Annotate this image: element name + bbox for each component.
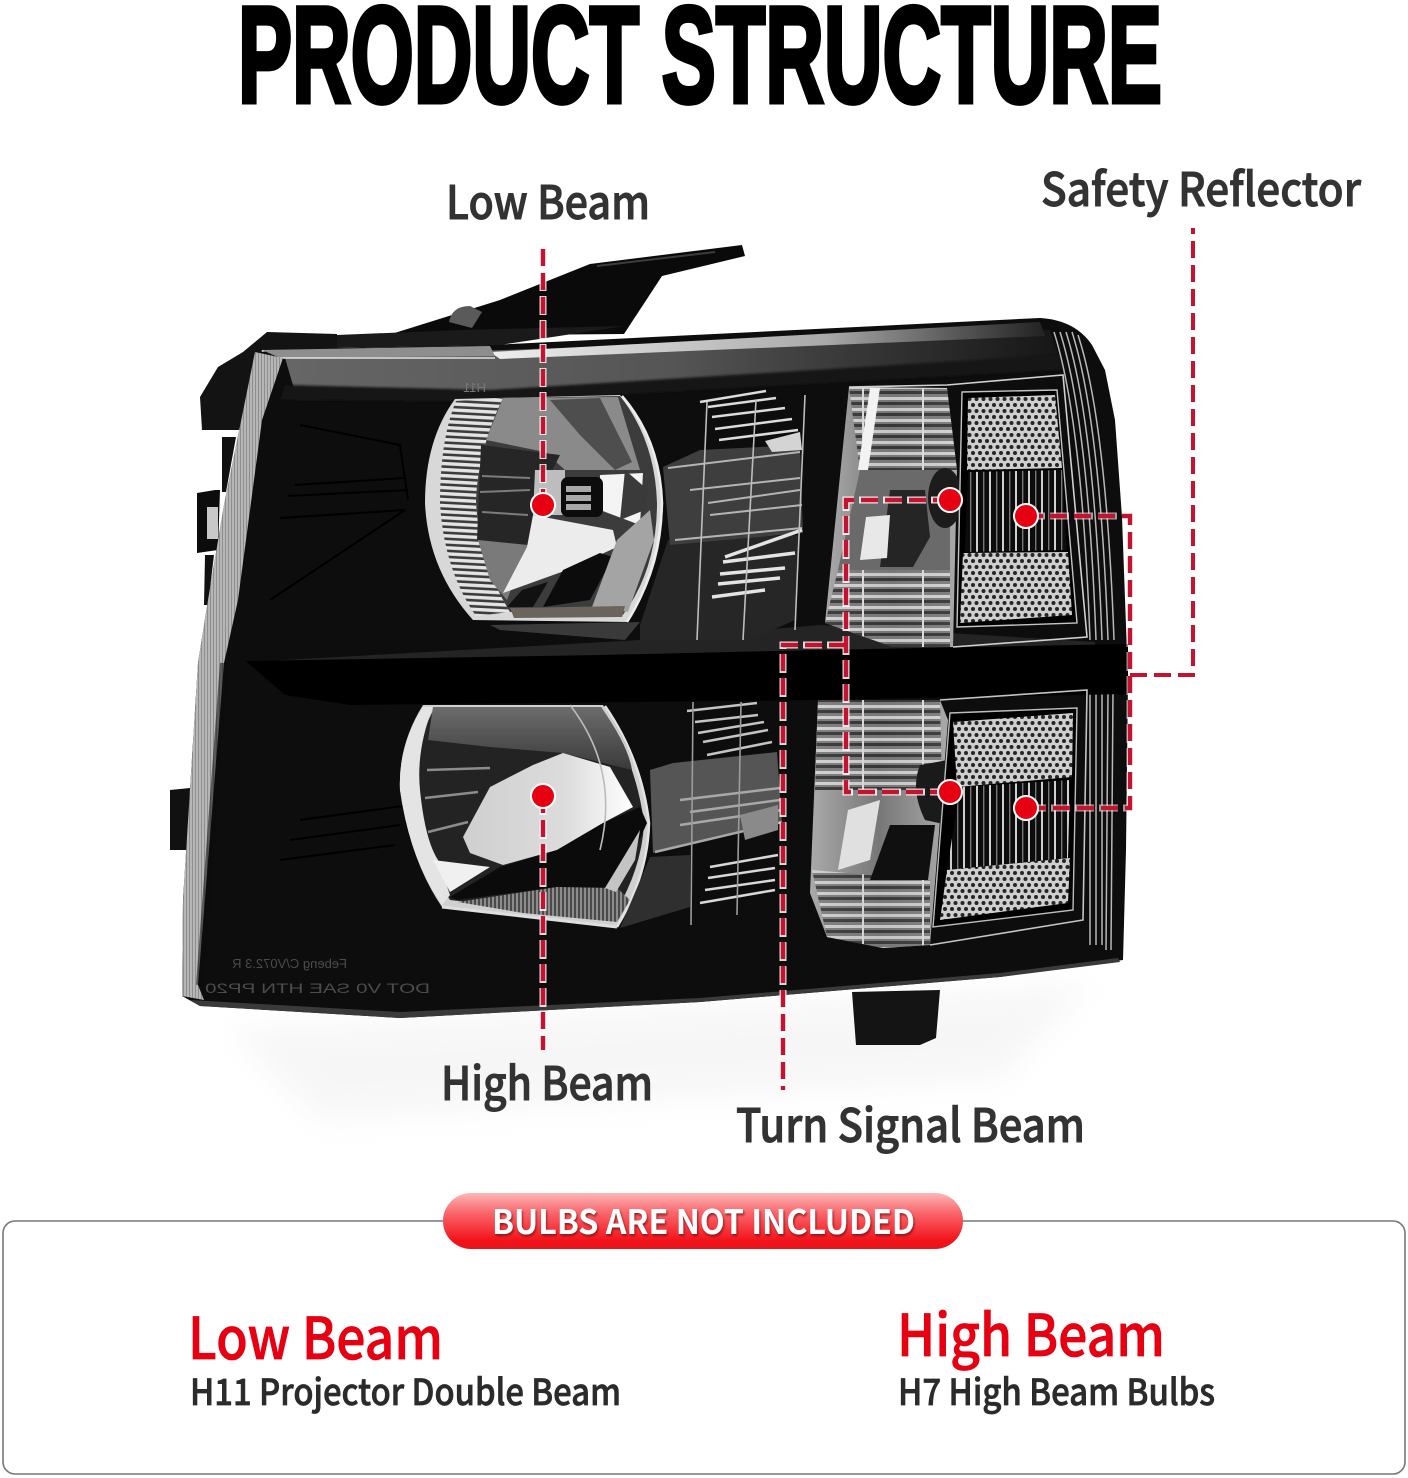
left streaks bbox=[425, 768, 490, 832]
lower gray bbox=[478, 540, 528, 600]
label: Safety Reflector: Safety Reflector bbox=[1041, 154, 1361, 220]
top clear dark strip bbox=[337, 326, 625, 348]
lamp body bbox=[182, 318, 1128, 1018]
dark top right facets bbox=[550, 398, 632, 470]
ribbed ring bbox=[440, 398, 510, 616]
left black inner line bbox=[200, 663, 224, 985]
white shaft bbox=[600, 473, 643, 525]
mesh and stripes bbox=[965, 470, 1067, 552]
clear lens top strip bbox=[490, 322, 1045, 359]
bright highlight bbox=[765, 432, 802, 452]
right white rim bbox=[605, 706, 649, 927]
interior bbox=[414, 707, 644, 918]
body ridges upper bbox=[270, 425, 410, 860]
embossed lens text bbox=[205, 380, 486, 996]
embossed lens text: H11 bbox=[463, 380, 486, 395]
panel: bulb info bbox=[3, 1193, 1405, 1474]
lower corner pod bbox=[810, 690, 1087, 948]
panel outline bbox=[3, 1221, 1405, 1474]
gray band under top lens bbox=[285, 330, 1060, 395]
dark left band bbox=[477, 445, 560, 545]
middle gray bbox=[533, 470, 565, 515]
low beam info: H11 Projector Double Beam bbox=[190, 1364, 621, 1416]
black wedges bbox=[507, 582, 548, 607]
frame bbox=[930, 690, 1087, 945]
chrome right bbox=[592, 510, 654, 612]
callout: Low Beam line bbox=[540, 248, 546, 505]
louvers bbox=[655, 703, 782, 903]
bottom white rim bbox=[442, 907, 617, 927]
under lip bbox=[190, 958, 1120, 1018]
chrome section bbox=[810, 700, 948, 948]
interior bbox=[476, 396, 657, 616]
lens outline bbox=[425, 395, 663, 622]
mounting bracket bbox=[385, 245, 745, 336]
bottom mesh bbox=[458, 887, 630, 922]
label: High Beam: High Beam bbox=[441, 1048, 653, 1114]
top gray area bbox=[428, 707, 632, 770]
mid block bbox=[650, 752, 782, 853]
embossed lens text: Febeng C/V072.3 R bbox=[232, 956, 347, 971]
clear lens left edge bbox=[182, 352, 283, 1000]
lower rear housing bbox=[620, 702, 782, 928]
bottom strip bbox=[510, 606, 625, 618]
bottom flange bbox=[490, 622, 640, 640]
low beam info bbox=[188, 1292, 621, 1416]
white highlight bbox=[838, 800, 880, 870]
embossed lens text: DOT V0 SAE HTN PP20 bbox=[205, 980, 430, 996]
housing vertical lines bbox=[697, 395, 805, 640]
headlight illustration bbox=[170, 245, 1128, 1120]
dark ellipse bbox=[916, 760, 948, 825]
upper low-beam reflector bbox=[425, 395, 663, 640]
under body bbox=[620, 855, 690, 928]
low beam info: Low Beam bbox=[188, 1292, 443, 1376]
callout lines bbox=[543, 228, 1193, 1090]
callout dots bbox=[531, 488, 1038, 820]
white blob bbox=[463, 753, 633, 865]
dark ellipse bbox=[928, 468, 962, 528]
callout: High Beam line bbox=[540, 796, 546, 1050]
lower high-beam reflector bbox=[400, 705, 650, 927]
chrome glint bbox=[605, 830, 640, 892]
arc line bbox=[570, 705, 606, 850]
frame and top line bbox=[849, 375, 1087, 647]
side tabs bbox=[170, 332, 940, 1045]
high beam info bbox=[897, 1289, 1215, 1416]
upper rear housing bbox=[640, 391, 805, 640]
lens top left clear corner bbox=[262, 346, 495, 358]
mid block bbox=[663, 445, 803, 545]
left white band bbox=[400, 707, 450, 905]
high beam info: H7 High Beam Bulbs bbox=[898, 1364, 1215, 1416]
right white rim bbox=[622, 396, 662, 622]
housing shadow body bbox=[640, 535, 800, 640]
label: Turn Signal Beam: Turn Signal Beam bbox=[736, 1090, 1085, 1156]
badge: bulbs not included: BULBS ARE NOT INCLUDED bbox=[492, 1195, 915, 1244]
dark center bbox=[880, 490, 930, 567]
shade above divider bbox=[250, 625, 1095, 662]
white lower strip bbox=[433, 860, 490, 892]
callout: Safety Reflector line bbox=[1026, 228, 1193, 808]
gray upper reflector bbox=[486, 397, 640, 470]
high beam info: High Beam bbox=[897, 1289, 1165, 1373]
white lower wedge bbox=[503, 515, 617, 593]
chrome section bbox=[825, 387, 957, 647]
mesh and stripes bbox=[947, 780, 1070, 870]
black wedge bbox=[450, 807, 647, 900]
callout: Turn Signal line bbox=[783, 500, 950, 1090]
housing vertical lines bbox=[691, 702, 741, 925]
white highlight bbox=[860, 515, 890, 560]
bulb socket bbox=[561, 477, 603, 517]
lens outline bbox=[400, 705, 650, 927]
label: Low Beam: Low Beam bbox=[446, 167, 650, 233]
dark center bbox=[870, 825, 935, 880]
black divider bar bbox=[246, 644, 1128, 705]
louvers bbox=[668, 391, 802, 597]
floor reflection bbox=[230, 985, 1090, 1120]
right edge stripes bbox=[1054, 332, 1114, 950]
upper corner pod bbox=[825, 375, 1087, 647]
